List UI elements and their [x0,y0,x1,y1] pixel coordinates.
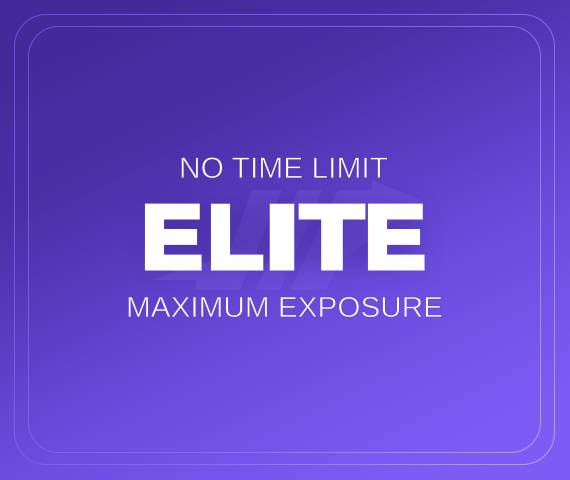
main title: elite: I [266,188,298,286]
main title: elite: L [208,188,263,286]
watermark logo [152,180,420,290]
heading shadow [150,205,420,267]
main title: elite: E [365,188,425,286]
main title: elite [142,188,425,286]
main title: elite: E [142,188,202,286]
bottom line: maximum exposure: MAXIMUM EXPOSURE [126,292,443,324]
main title: elite: T [301,188,363,286]
top line: no time limit: NO TIME LIMIT [179,152,388,185]
inner rounded frame [28,26,540,452]
